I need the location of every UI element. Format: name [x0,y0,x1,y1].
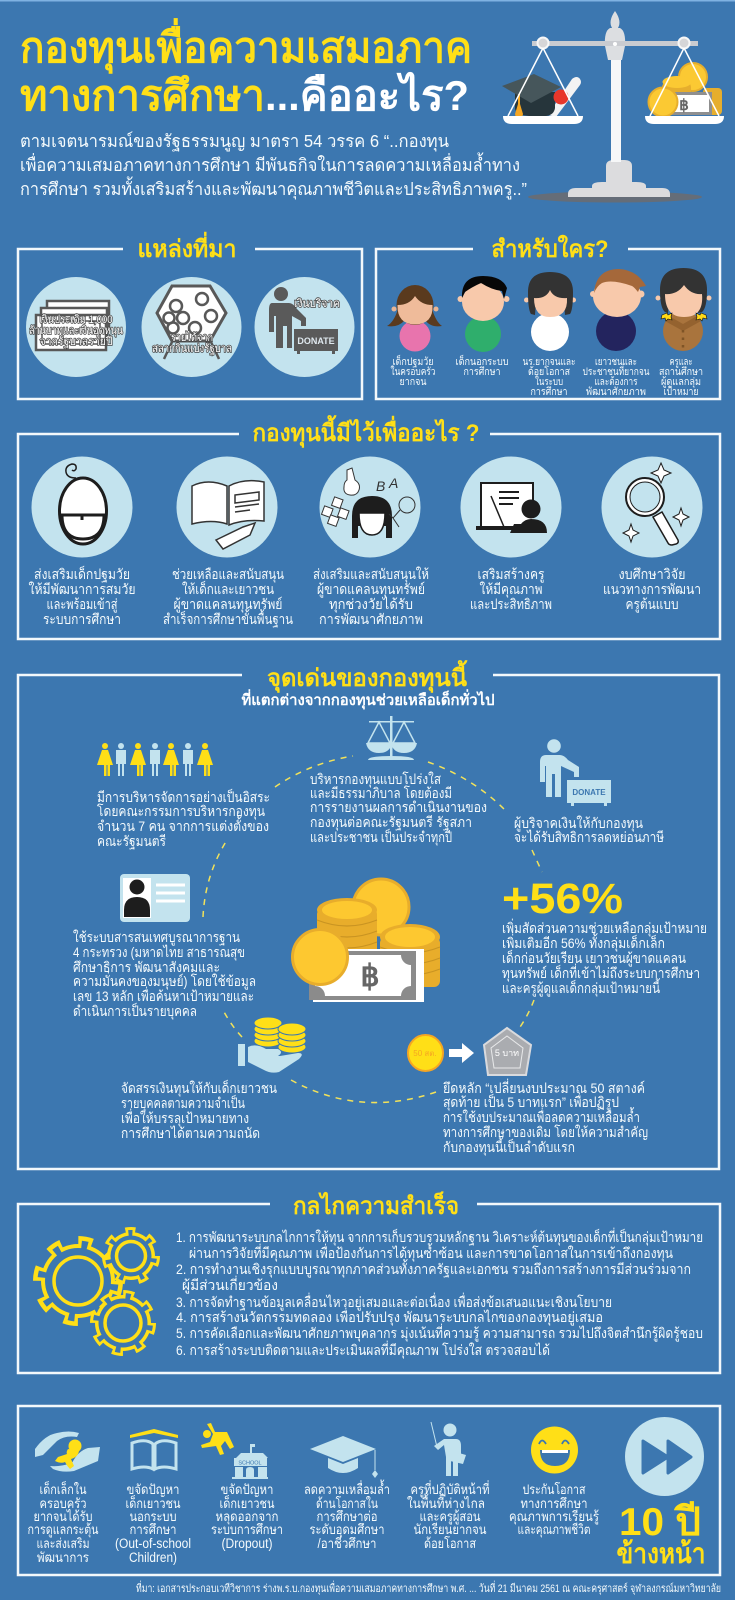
purpose 2: book support [163,456,293,628]
heading: sources: แหล่งที่มา [138,231,236,263]
heading: highlights: จุดเด่นของกองทุนนี้ [267,659,468,694]
coins and banknote on pan [648,63,722,116]
text: information system [73,929,256,1020]
purpose 5: research: แนวทางการพัฒนา [603,581,701,597]
goal 1: young children [28,1432,100,1565]
icon: ID card [120,874,190,922]
icon: central coins and banknote: ฿ [360,960,380,993]
text: independent governance: มีการบริหารจัดการอย่างเป็นอิสระ [97,788,270,805]
goal 1: young children: ครอบครัว [40,1496,86,1511]
text: individual allocation: รายบุคคลตามความจำเป็น [121,1094,245,1112]
person: youth and citizens: ประชาชนที่ยากจน [582,364,650,378]
person: poor student [522,272,576,398]
goal 3: dropout [201,1423,283,1551]
dashed ring [203,756,542,1103]
purpose 3: talent development: การพัฒนาศักยภาพ [319,611,423,627]
person: poor student: ในระบบ [535,375,563,388]
goal 5: rural teachers: ด้อยโอกาส [424,1535,476,1551]
goal 4: higher education: ด้านโอกาสใน [316,1495,378,1511]
person: youth and citizens [582,269,650,398]
goal 2: out of school children: เด็กเยาวชน [126,1494,180,1511]
goal 1: young children: เด็กเล็กใน [40,1480,86,1497]
list: mechanisms: 6. การสร้างระบบติดตามและประเมินผลที่มีคุณภาพ โปร่งใส ตรวจสอบได้ [176,1341,550,1359]
panel: purposes [18,414,720,639]
purpose 1: early childhood: ระบบการศึกษา [43,611,121,627]
heading: success mechanisms: กลไกความสำเร็จ [293,1191,459,1220]
goal 6: quality opportunity: คุณภาพการเรียนรู้ [509,1509,599,1525]
goal 3: dropout: หลุดออกจาก [216,1509,278,1525]
coins and banknote on pan: ฿ [679,97,689,114]
purpose 5: research: ครูต้นแบบ [626,596,678,613]
goal 3: dropout: ขจัดปัญหา [220,1482,274,1497]
text: individual allocation [121,1079,277,1141]
icon: donation: เงินบริจาค [294,298,340,310]
text: tax deduction: จะได้รับสิทธิการลดหย่อนภาษี [514,829,664,845]
person: out of school child: เด็กนอกระบบ [456,354,508,368]
goal 1: young children: การดูแลกระตุ้น [28,1522,98,1538]
person: preschool child: เด็กปฐมวัย [392,354,434,368]
text: budget reform: ทางการศึกษาของเดิม โดยให้ความสำคัญ [443,1124,648,1140]
stat: plus 56 percent: +56% [502,875,623,923]
text: budget reform: การใช้งบประมาณเพื่อลดความเหลื่อมล้ำ [443,1107,640,1125]
list: mechanisms: ผู้มีส่วนเกี่ยวข้อง [182,1276,278,1294]
list: mechanisms [176,1228,703,1359]
panel: highlights [18,659,719,1169]
icon: lottery drum [142,277,242,377]
icon: balance [366,716,417,760]
goal 6: quality opportunity: ทางการศึกษา [520,1496,588,1511]
person: preschool child: ในครอบครัว [390,365,436,378]
purpose 2: book support: ช่วยเหลือและสนับสนุน [172,566,284,583]
text: individual allocation: การศึกษาได้ตามความถนัด [121,1125,260,1141]
icon: donor [540,739,611,806]
title: ทางการศึกษา...คืออะไร? [20,71,469,119]
list: mechanisms: 3. การจัดทำฐานข้อมูลเคลื่อนไหวอยู่เสมอและต่อเนื่อง เพื่อส่งข้อเสนอแนะเชิงนโยบาย [176,1293,612,1311]
text: independent governance: คณะรัฐมนตรี [97,833,166,850]
purpose 4: teacher: และประสิทธิภาพ [470,596,552,612]
board members figures [97,743,213,776]
purpose 4: teacher: ให้มีคุณภาพ [480,581,542,598]
goal 2: out of school children: (Out-of-school [115,1536,191,1551]
goal 1: young children: พัฒนาการ [37,1550,89,1565]
purpose 1: early childhood: ให้มีพัฒนาการสมวัย [28,581,136,597]
purpose 1: early childhood: ส่งเสริมเด็กปฐมวัย [34,565,130,583]
text: 56 percent detail: เพิ่มเติมอีก 56% ทั้งกลุ่มเด็กเล็ก [502,933,665,952]
heading: for whom: สำหรับใคร? [492,234,608,263]
intro text: ตามเจตนารมณ์ของรัฐธรรมนูญ มาตรา 54 วรรค 6 “..กองทุน [20,131,449,152]
text: transparency [310,771,487,846]
person: poor student: ด้อยโอกาส [528,365,570,378]
text: individual allocation: เพื่อให้บรรลุเป้าหมายทาง [121,1109,249,1127]
icon: fast forward [625,1417,704,1496]
purpose 3: talent development [313,456,429,627]
text: individual allocation: จัดสรรเงินทุนให้กับเด็กเยาวชน [121,1079,277,1097]
person: poor student: นร.ยากจนและ [522,356,576,368]
text: information system: ศึกษาธิการ พัฒนาสังคมและ [73,959,220,975]
text: budget reform: กับกองทุนนี้เป็นลำดับแรก [443,1137,575,1156]
person: out of school child [456,276,510,378]
person: youth and citizens: พัฒนาศักยภาพ [586,386,646,398]
goal 5: rural teachers: นักเรียนยากจน [414,1522,486,1537]
text: budget reform: สุดท้าย เป็น 5 บาทแรก” เพื่อปฏิรูป [443,1093,619,1111]
panel: sources [18,231,362,399]
purpose 5: research [602,456,702,613]
list: mechanisms: ผ่านการวิจัยที่มีคุณภาพ เพื่อป้องกันการได้ทุนซ้ำซ้อน และการขาดโอกาสในการเข้าถึงกองทุน [189,1243,673,1262]
icon: 50 satang to 5 baht [408,1028,531,1075]
person: out of school child: การศึกษา [464,366,500,378]
purpose 2: book support: ให้เด็กและเยาวชน [182,580,274,597]
text: independent governance: จำนวน 7 คน จากการแต่งตั้งของ [97,816,269,834]
purpose 4: teacher [460,456,562,612]
text: independent governance [97,788,270,850]
text: transparency: และมีธรรมาภิบาล โดยต้องมี [310,785,452,801]
heading: purposes: กองทุนนี้มีไว้เพื่ออะไร ? [252,414,480,449]
heading: next 10 years: ข้างหน้า [616,1538,706,1569]
icon: donation: DONATE [297,336,335,346]
goal 2: out of school children: นอกระบบ [130,1509,176,1524]
person: teachers: ผู้ดูแลกลุ่ม [661,376,701,388]
icon: donation [254,277,354,377]
purpose 2: book support: สำเร็จการศึกษาขั้นพื้นฐาน [163,609,293,628]
icon: hand with coins [238,1017,306,1073]
text: transparency: การรายงานผลการดำเนินงานของ [310,799,487,815]
goal 6: quality opportunity: ประกันโอกาส [522,1481,586,1497]
icon: gears [38,1230,157,1353]
panel: 10 year outlook [18,1406,720,1575]
goal 3: dropout: SCHOOL [238,1460,262,1466]
goal 5: rural teachers: ครูที่ปฏิบัติหน้าที่ [410,1480,490,1498]
goal 5: rural teachers: ในพื้นที่ห่างไกล [407,1493,485,1511]
person: teachers: สถานศึกษา [659,366,703,378]
purpose 5: research: งบศึกษาวิจัย [618,566,686,582]
icon: lottery drum: สลากกินแบ่งรัฐบาล [152,343,232,355]
person: youth and citizens: และต้องการ [594,376,638,388]
goal 3: dropout: เด็กเยาวชน [220,1494,274,1511]
text: information system: ใช้ระบบสารสนเทศบูรณาการฐาน [73,929,240,946]
text: budget reform: ยึดหลัก “เปลี่ยนงบประมาณ 50 สตางค์ [443,1079,645,1096]
goal 2: out of school children: ขจัดปัญหา [126,1482,180,1497]
icon: donor: DONATE [572,788,606,797]
goal 1: young children: ยากจนได้รับ [34,1509,92,1524]
text: tax deduction [514,815,664,845]
panel: success mechanisms [18,1191,720,1373]
icon: balance scale [502,11,724,202]
title: กองทุนเพื่อความเสมอภาค [20,18,472,74]
goal 5: rural teachers: และครูผู้สอน [420,1509,480,1525]
icon: seed money banknotes: เงินประเดิม 1,000 [40,314,112,326]
goal 2: out of school children [115,1429,191,1565]
heading: next 10 years: 10 ปี [619,1501,701,1544]
text: transparency: บริหารกองทุนแบบโปร่งใส [310,771,441,788]
goal 3: dropout: (Dropout) [222,1536,272,1551]
purpose 4: teacher: เสริมสร้างครู [478,566,545,583]
person: youth and citizens: เยาวชนและ [595,356,637,368]
icon: seed money banknotes: ล้านบาทและเงินอุดหนุน [29,325,123,337]
text: 56 percent detail: และครูผู้ดูแลเด็กกลุ่มเป้าหมายนี้ [502,978,660,997]
person: preschool child [387,285,442,388]
goal 6: quality opportunity: และคุณภาพชีวิต [518,1522,590,1538]
goal 6: quality opportunity [509,1426,599,1538]
goal 4: higher education [304,1436,390,1551]
icon: seed money banknotes [26,277,126,377]
text: information system: เลข 13 หลัก เพื่อค้นหาเป้าหมายและ [73,987,254,1004]
icon: lottery drum: รายได้จาก [171,331,213,344]
icon: 50 satang to 5 baht: 50 สต. [413,1049,437,1058]
heading: next 10 years [616,1501,706,1569]
list: mechanisms: 4. การสร้างนวัตกรรมทดลอง เพื่อปรับปรุง พัฒนาระบบกลไกของกองทุนอยู่เสมอ [176,1308,603,1326]
heading: highlights: ที่แตกต่างจากกองทุนช่วยเหลือเด็กทั่วไป [242,689,494,710]
icon: central coins and banknote [292,879,440,1002]
person: poor student: การศึกษา [530,386,568,398]
person: teachers: ครูและ [670,356,692,368]
text: transparency: กองทุนต่อคณะรัฐมนตรี รัฐสภา [310,814,472,831]
title [20,18,472,119]
goal 2: out of school children: Children) [129,1550,177,1565]
icon: seed money banknotes: จากรัฐบาลรายปี [40,335,113,348]
text: 56 percent detail [502,919,707,997]
text: tax deduction: ผู้บริจาคเงินให้กับกองทุน [514,815,643,832]
goal 5: rural teachers [407,1422,490,1551]
purpose 3: talent development: A [388,475,398,491]
goal 1: young children: และส่งเสริม [36,1536,90,1551]
purpose 1: early childhood [28,456,136,627]
goal 4: higher education: การศึกษาต่อ [316,1509,378,1524]
intro text: เพื่อความเสมอภาคทางการศึกษา มีพันธกิจในการลดความเหลื่อมล้ำทาง [20,152,520,175]
text: transparency: และประชาชน เป็นประจำทุกปี [310,828,452,846]
purpose 3: talent development: ผู้ขาดแคลนทุนทรัพย์ [317,581,425,598]
text: information system: ความมั่นคงของมนุษย์) โดยใช้ข้อมูล [73,972,256,990]
person: preschool child: ยากจน [400,376,426,388]
purpose 1: early childhood: และพร้อมเข้าสู่ [46,596,118,613]
goal 3: dropout: ระบบการศึกษา [211,1522,283,1537]
purpose 3: talent development: ทุกช่วงวัยได้รับ [329,596,413,613]
goal 2: out of school children: การศึกษา [130,1522,176,1537]
goal 4: higher education: ลดความเหลื่อมล้ำ [304,1479,390,1497]
intro text: การศึกษา รวมทั้งเสริมสร้างและพัฒนาคุณภาพชีวิตและประสิทธิภาพครู..” [20,176,527,200]
person: teachers [656,268,712,398]
person: teachers: เป้าหมาย [664,386,698,398]
text: information system: ดำเนินการเป็นรายบุคคล [73,1002,197,1020]
text: 56 percent detail: เพิ่มสัดส่วนความช่วยเหลือกลุ่มเป้าหมาย [502,919,707,937]
text: independent governance: โดยคณะกรรมการบริหารกองทุน [97,803,265,820]
goal 4: higher education: /อาชีวศึกษา [318,1536,376,1551]
purpose 3: talent development: B [376,478,385,494]
icon: 50 satang to 5 baht: 5 บาท [495,1048,519,1058]
text: information system: 4 กระทรวง (มหาดไทย สาธารณสุข [73,944,245,961]
text: 56 percent detail: เด็กก่อนวัยเรียน เยาวชนผู้ขาดแคลน [502,949,686,967]
text: 56 percent detail: ทุนทรัพย์ เด็กที่เข้าไม่ถึงระบบการศึกษา [502,964,700,982]
heading: highlights [242,659,494,710]
graduation cap and diploma [502,74,581,118]
text: budget reform [443,1079,648,1156]
goal 4: higher education: ระดับอุดมศึกษา [310,1522,384,1538]
purpose 3: talent development: ส่งเสริมและสนับสนุนให้ [313,566,429,583]
panel: beneficiaries [376,234,720,399]
intro text [20,131,527,200]
purpose 2: book support: ผู้ขาดแคลนทุนทรัพย์ [174,596,282,613]
